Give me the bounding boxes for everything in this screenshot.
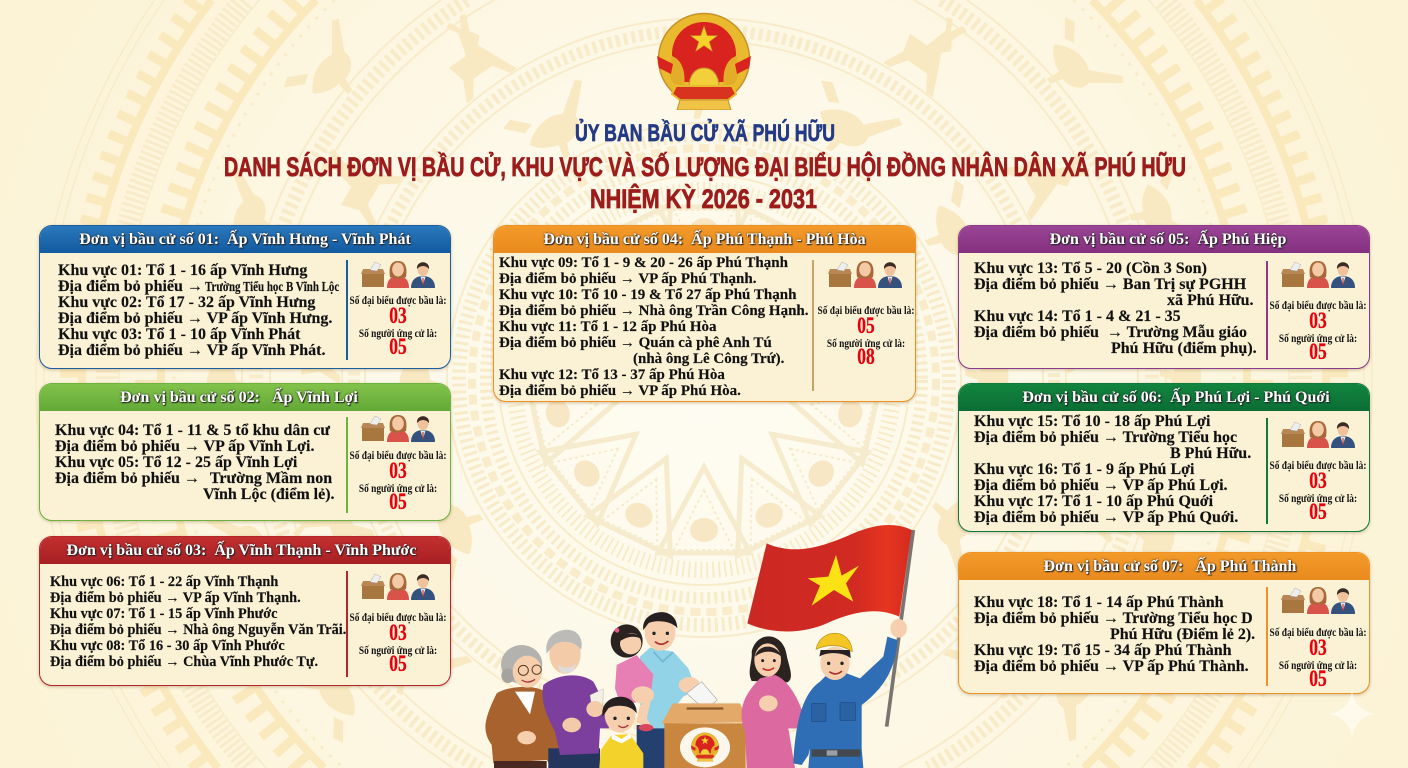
text: unit 07 areas: Khu vực 19: Tổ 15 - 34 ấp Phú Thành — [974, 642, 1232, 659]
text: unit 05 areas: Khu vực 13: Tổ 5 - 20 (Cồn 3 Son) — [974, 260, 1207, 277]
text: unit 03 areas: Khu vực 06: Tổ 1 - 22 ấp Vĩnh Thạnh — [50, 574, 278, 590]
text: unit 02 areas: Địa điểm bỏ phiếu → VP ấp Vĩnh Lợi. — [55, 438, 314, 455]
stats 04: Số người ứng cử là: — [827, 336, 905, 350]
text: unit 06 areas: Khu vực 16: Tổ 1 - 9 ấp Phú Lợi — [974, 461, 1194, 478]
text: unit 06 areas: Khu vực 17: Tổ 1 - 10 ấp Phú Quới — [974, 493, 1213, 510]
stats 05: 05 — [1309, 339, 1327, 364]
stats 05 — [1270, 298, 1366, 364]
divider 02 — [346, 417, 348, 513]
stats 04: Số đại biểu được bầu là: — [818, 303, 914, 317]
icon: voters 01 — [361, 261, 435, 288]
text: unit 04 areas: Địa điểm bỏ phiếu → Nhà ông Trần Công Hạnh. — [499, 303, 809, 319]
stats 02 — [350, 448, 446, 514]
text: unit 01 areas: Địa điểm bỏ phiếu → VP ấp Vĩnh Phát. — [58, 342, 325, 359]
header 02 — [40, 384, 450, 411]
title block — [224, 118, 1186, 214]
stats 06: Số đại biểu được bầu là: — [1270, 458, 1366, 472]
panel: unit 06 — [958, 383, 1370, 532]
text: unit 01 areas: Địa điểm bỏ phiếu → — [58, 278, 203, 295]
divider 05 — [1266, 261, 1268, 360]
stats 03 — [350, 610, 446, 676]
panel: unit 07 — [958, 552, 1370, 694]
text: unit 03 areas: Địa điểm bỏ phiếu → VP ấp Vĩnh Thạnh. — [50, 590, 301, 606]
panel: unit 04 — [493, 225, 916, 402]
text: unit 07 areas: Phú Hữu (Điểm lẻ 2). — [1110, 626, 1255, 643]
watermark sparkle — [1329, 691, 1375, 737]
committee name: ỦY BAN BẦU CỬ XÃ PHÚ HỮU — [575, 118, 835, 147]
text: unit 04 areas: Địa điểm bỏ phiếu → VP ấp Phú Thạnh. — [499, 271, 756, 287]
header 04: Đơn vị bầu cử số 04: Ấp Phú Thạnh - Phú Hòa — [543, 231, 866, 248]
term: NHIỆM KỲ 2026 - 2031 — [590, 183, 817, 214]
stats 02: Số người ứng cử là: — [359, 481, 437, 495]
header 01: Đơn vị bầu cử số 01: Ấp Vĩnh Hưng - Vĩnh Phát — [79, 231, 411, 248]
stats 05: Số đại biểu được bầu là: — [1270, 298, 1366, 312]
text: unit 02 areas: Khu vực 05: Tổ 12 - 25 ấp Vĩnh Lợi — [55, 454, 297, 471]
text: unit 05 areas: Địa điểm bỏ phiếu → Ban Trị sự PGHH — [974, 276, 1246, 293]
header 07 — [959, 553, 1369, 580]
stats 04: 05 — [857, 313, 875, 338]
stats 01: 05 — [389, 334, 407, 359]
divider 07 — [1266, 587, 1268, 686]
icon: voters 02 — [361, 415, 435, 442]
text: unit 06 areas: Địa điểm bỏ phiếu → VP ấp Phú Quới. — [974, 509, 1238, 526]
stats 07: Số người ứng cử là: — [1279, 658, 1357, 672]
divider 03 — [346, 571, 348, 677]
text: unit 07 areas: Địa điểm bỏ phiếu → VP ấp Phú Thành. — [974, 658, 1249, 675]
text: unit 05 areas — [974, 260, 1257, 357]
header 06 — [959, 384, 1369, 411]
divider 04 — [812, 260, 814, 391]
text: unit 01 areas — [58, 262, 339, 359]
boy — [599, 697, 643, 768]
icon: voters 06 — [1281, 421, 1355, 448]
stats 02: Số đại biểu được bầu là: — [350, 448, 446, 462]
stats 03: 05 — [389, 651, 407, 676]
header 03: Đơn vị bầu cử số 03: Ấp Vĩnh Thạnh - Vĩnh Phước — [67, 542, 416, 559]
text: unit 05 areas: xã Phú Hữu. — [1167, 292, 1254, 309]
stats 03: 03 — [389, 620, 407, 645]
text: unit 06 areas — [974, 413, 1251, 526]
stats 03: Số đại biểu được bầu là: — [350, 610, 446, 624]
text: unit 02 areas: Vĩnh Lộc (điểm lẻ). — [203, 486, 335, 503]
stats 01: Số người ứng cử là: — [359, 326, 437, 340]
stats 07: Số đại biểu được bầu là: — [1270, 625, 1366, 639]
text: unit 04 areas: Khu vực 12: Tổ 13 - 37 ấp Phú Hòa — [499, 367, 725, 383]
text: unit 05 areas: Phú Hữu (điểm phụ). — [1111, 340, 1257, 357]
divider 06 — [1266, 418, 1268, 524]
stats 04 — [818, 303, 914, 369]
stats 06 — [1270, 458, 1366, 524]
text: unit 01 areas: Khu vực 02: Tổ 17 - 32 ấp Vĩnh Hưng — [58, 294, 315, 311]
illustration: family voting with flag — [485, 525, 916, 768]
header 06: Đơn vị bầu cử số 06: Ấp Phú Lợi - Phú Quới — [1022, 389, 1330, 406]
text: unit 04 areas: Địa điểm bỏ phiếu → Quán cà phê Anh Tú — [499, 335, 772, 351]
text: unit 05 areas: Khu vực 14: Tổ 1 - 4 & 21 - 35 — [974, 308, 1181, 325]
emblem: national coat of arms — [657, 12, 751, 110]
stats 04: 08 — [857, 344, 875, 369]
stats 06: 03 — [1309, 468, 1327, 493]
text: unit 07 areas: Khu vực 18: Tổ 1 - 14 ấp Phú Thành — [974, 594, 1224, 611]
icon: voters 04 — [828, 261, 902, 288]
text: unit 04 areas — [499, 255, 809, 399]
text: unit 04 areas: Khu vực 10: Tổ 10 - 19 & Tổ 27 ấp Phú Thạnh — [499, 287, 796, 303]
text: unit 07 areas — [974, 594, 1255, 675]
text: unit 05 areas: Địa điểm bỏ phiếu → Trường Mẫu giáo — [974, 324, 1247, 341]
grandfather — [542, 630, 609, 768]
stats 01: 03 — [389, 303, 407, 328]
flag — [747, 525, 913, 727]
icon: voters 07 — [1281, 587, 1355, 614]
text: unit 06 areas: Khu vực 15: Tổ 10 - 18 ấp Phú Lợi — [974, 413, 1210, 430]
panel: unit 01 — [39, 225, 451, 369]
text: unit 04 areas: (nhà ông Lê Công Trứ). — [633, 351, 784, 367]
text: unit 01 areas: Địa điểm bỏ phiếu → VP ấp Vĩnh Hưng. — [58, 310, 332, 327]
stats 02: 05 — [389, 489, 407, 514]
text: unit 01 areas: Khu vực 03: Tổ 1 - 10 ấp Vĩnh Phát — [58, 326, 300, 343]
text: unit 02 areas: Khu vực 04: Tổ 1 - 11 & 5 tổ khu dân cư — [55, 422, 330, 439]
grandmother — [485, 645, 565, 768]
header 07: Đơn vị bầu cử số 07: Ấp Phú Thành — [1044, 558, 1296, 575]
header 05 — [959, 226, 1369, 253]
text: unit 06 areas: Địa điểm bỏ phiếu → VP ấp Phú Lợi. — [974, 477, 1228, 494]
ballot box — [662, 682, 748, 768]
stats 01 — [350, 293, 446, 359]
girl — [611, 624, 654, 731]
text: unit 03 areas: Địa điểm bỏ phiếu → Chùa Vĩnh Phước Tự. — [50, 654, 318, 670]
header 04 — [494, 226, 915, 253]
father — [637, 612, 700, 768]
text: unit 04 areas: Khu vực 11: Tổ 1 - 12 ấp Phú Hòa — [499, 319, 717, 335]
text: unit 06 areas: Địa điểm bỏ phiếu → Trường Tiểu học — [974, 429, 1237, 446]
text: unit 04 areas: Địa điểm bỏ phiếu → VP ấp Phú Hòa. — [499, 383, 741, 399]
stats 06: Số người ứng cử là: — [1279, 491, 1357, 505]
header 01 — [40, 226, 450, 253]
panel: unit 05 — [958, 225, 1370, 369]
panel: unit 02 — [39, 383, 451, 521]
stats 03: Số người ứng cử là: — [359, 643, 437, 657]
text: unit 01 areas: Trường Tiểu học B Vĩnh Lộc — [205, 279, 339, 294]
worker — [793, 619, 907, 768]
text: unit 03 areas: Địa điểm bỏ phiếu → Nhà ông Nguyễn Văn Trãi. — [50, 622, 346, 638]
panel: unit 03 — [39, 536, 451, 686]
icon: voters 05 — [1281, 261, 1355, 288]
header 03 — [40, 537, 450, 564]
stats 06: 05 — [1309, 499, 1327, 524]
stats 01: Số đại biểu được bầu là: — [350, 293, 446, 307]
text: unit 03 areas: Khu vực 07: Tổ 1 - 15 ấp Vĩnh Phước — [50, 606, 278, 622]
text: unit 04 areas: Khu vực 09: Tổ 1 - 9 & 20 - 26 ấp Phú Thạnh — [499, 255, 788, 271]
mother — [741, 636, 805, 768]
stats 05: Số người ứng cử là: — [1279, 331, 1357, 345]
header 05: Đơn vị bầu cử số 05: Ấp Phú Hiệp — [1050, 231, 1286, 248]
stats 07: 05 — [1309, 666, 1327, 691]
text: unit 02 areas: Địa điểm bỏ phiếu → Trường Mầm non — [55, 470, 332, 487]
stats 07: 03 — [1309, 635, 1327, 660]
text: unit 07 areas: Địa điểm bỏ phiếu → Trường Tiểu học D — [974, 610, 1253, 627]
stats 02: 03 — [389, 458, 407, 483]
text: unit 01 areas: Khu vực 01: Tổ 1 - 16 ấp Vĩnh Hưng — [58, 262, 307, 279]
text: unit 03 areas: Khu vực 08: Tổ 16 - 30 ấp Vĩnh Phước — [50, 638, 285, 654]
divider 01 — [346, 260, 348, 360]
stats 05: 03 — [1309, 308, 1327, 333]
icon: voters 03 — [361, 573, 435, 600]
header 02: Đơn vị bầu cử số 02: Ấp Vĩnh Lợi — [120, 389, 358, 406]
stats 07 — [1270, 625, 1366, 691]
text: unit 06 areas: B Phú Hữu. — [1170, 445, 1251, 462]
text: unit 03 areas — [50, 574, 346, 670]
text: unit 02 areas — [55, 422, 335, 503]
